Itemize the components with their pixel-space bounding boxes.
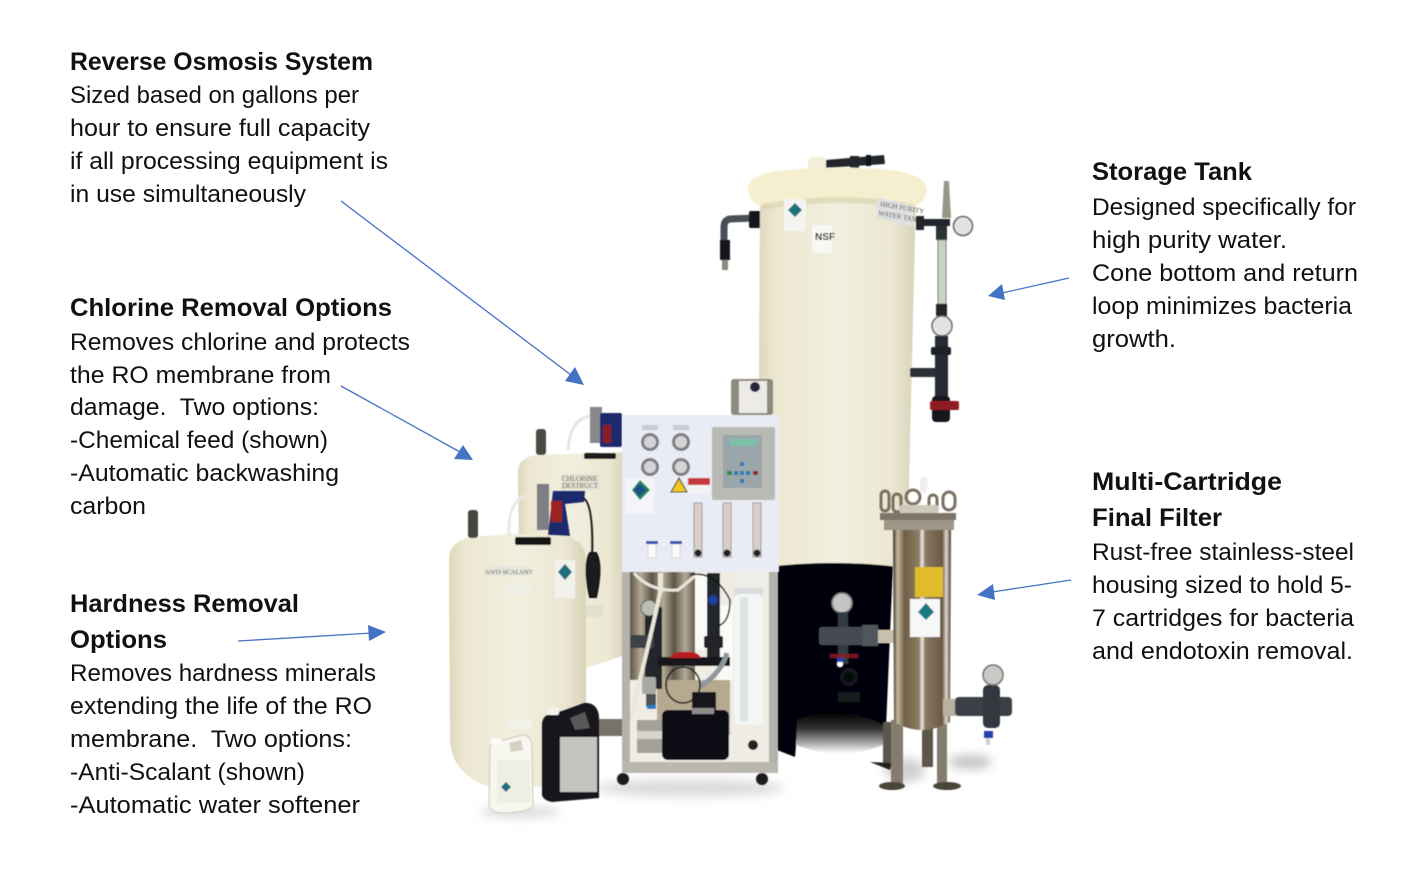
text block: Storage Tank: Cone bottom and return — [1092, 260, 1358, 287]
text block: Chlorine Removal Options: Removes chlorine and protects — [70, 329, 410, 356]
text block: Storage Tank — [1092, 158, 1358, 353]
chlorine destruct tank: CHLORINE — [562, 475, 597, 483]
filter labels — [915, 567, 943, 597]
RO membranes — [630, 572, 695, 680]
text block: Multi-Cartridge Final Filter: 7 cartridges for bacteria — [1092, 605, 1355, 632]
sample valves — [646, 541, 682, 558]
text block: Multi-Cartridge Final Filter: housing sized to hold 5- — [1092, 572, 1352, 599]
flowmeters — [694, 503, 761, 557]
text block: Storage Tank: loop minimizes bacteria — [1092, 293, 1353, 320]
text block: Chlorine Removal Options: the RO membrane from — [70, 362, 331, 389]
chlorine destruct tank: DESTRUCT — [562, 482, 599, 490]
recirculation loop with flowmeter and gauges — [910, 181, 972, 422]
text block: Reverse Osmosis System: in use simultaneously — [70, 181, 306, 208]
text block: Multi-Cartridge Final Filter: Final Filter — [1092, 504, 1222, 532]
cone base piping — [819, 593, 895, 702]
text block: Reverse Osmosis System: Sized based on gallons per — [70, 82, 359, 109]
tank labels: WATER TANK — [878, 209, 922, 225]
timer box — [731, 379, 773, 415]
arrow: RO system — [341, 201, 584, 385]
arrow: hardness removal — [238, 625, 386, 641]
multi-cartridge filter — [870, 477, 1012, 790]
product photo: water treatment system — [449, 155, 1012, 818]
jug: black — [542, 703, 599, 802]
text block: Hardness Removal Options: extending the life of the RO — [70, 693, 372, 720]
control panel — [622, 415, 779, 572]
text block: Multi-Cartridge Final Filter: and endotoxin removal. — [1092, 638, 1353, 665]
text block: Reverse Osmosis System: if all processing equipment is — [70, 148, 388, 175]
filter body — [893, 530, 951, 730]
text block: Chlorine Removal Options: -Automatic backwashing — [70, 460, 339, 487]
arrow: final filter — [977, 580, 1071, 600]
anti-scalant tank: ANTI-SCALANT — [485, 569, 533, 576]
tank left pipe — [720, 211, 761, 270]
text block: Chlorine Removal Options: carbon — [70, 493, 146, 520]
text block: Reverse Osmosis System: hour to ensure full capacity — [70, 115, 370, 142]
text block: Chlorine Removal Options: damage. Two options: — [70, 394, 319, 421]
tank labels: HIGH PURITY — [880, 200, 925, 216]
tank body — [758, 195, 916, 568]
floor shadows — [480, 755, 992, 818]
reverse osmosis unit — [617, 379, 779, 785]
filter outlet and gauge — [943, 665, 1012, 745]
text block: Storage Tank: growth. — [1092, 326, 1176, 353]
floor shade under cone — [796, 712, 886, 754]
filter head and clamps — [881, 490, 955, 513]
tank labels: NSF — [815, 232, 835, 243]
anti-scalant tank — [449, 484, 623, 787]
text block: Storage Tank: high purity water. — [1092, 227, 1287, 254]
text block: Multi-Cartridge Final Filter: Rust-free stainless-steel — [1092, 539, 1354, 566]
cone base — [777, 562, 893, 757]
text block: Hardness Removal Options: membrane. Two options: — [70, 726, 352, 753]
text block: Chlorine Removal Options: Chlorine Removal Options — [70, 294, 392, 322]
text block: Chlorine Removal Options: -Chemical feed (shown) — [70, 427, 328, 454]
text block: Hardness Removal Options: -Anti-Scalant (shown) — [70, 759, 305, 786]
text block: Multi-Cartridge Final Filter — [1092, 468, 1355, 665]
frame rails — [622, 572, 630, 768]
text block: Hardness Removal Options: -Automatic water softener — [70, 792, 360, 819]
storage tank — [720, 155, 972, 757]
chlorine destruct tank — [518, 407, 625, 668]
text block: Hardness Removal Options: Hardness Removal — [70, 590, 299, 618]
tank lid — [748, 168, 927, 206]
RO plumbing and pump — [630, 573, 730, 760]
tank top fitting — [808, 155, 885, 174]
text block: Storage Tank: Storage Tank — [1092, 158, 1252, 186]
text block: Hardness Removal Options: Options — [70, 626, 167, 654]
text block: Multi-Cartridge Final Filter: Multi-Cartridge — [1092, 468, 1282, 496]
text block: Hardness Removal Options — [70, 590, 376, 819]
frame interior — [625, 572, 775, 764]
text block: Reverse Osmosis System: Reverse Osmosis System — [70, 48, 373, 76]
text block: Chlorine Removal Options — [70, 294, 410, 520]
jug: white — [489, 735, 533, 813]
text block: Hardness Removal Options: Removes hardness minerals — [70, 660, 376, 687]
controller — [712, 427, 775, 500]
arrow: chlorine removal — [341, 386, 473, 460]
text block: Storage Tank: Designed specifically for — [1092, 194, 1356, 221]
text block: Reverse Osmosis System — [70, 48, 388, 208]
casters — [617, 740, 768, 785]
tank labels — [784, 197, 925, 253]
cartridge housing — [734, 573, 768, 725]
filter legs — [870, 720, 961, 790]
chemical jugs — [489, 703, 599, 813]
arrow: storage tank — [988, 278, 1069, 300]
